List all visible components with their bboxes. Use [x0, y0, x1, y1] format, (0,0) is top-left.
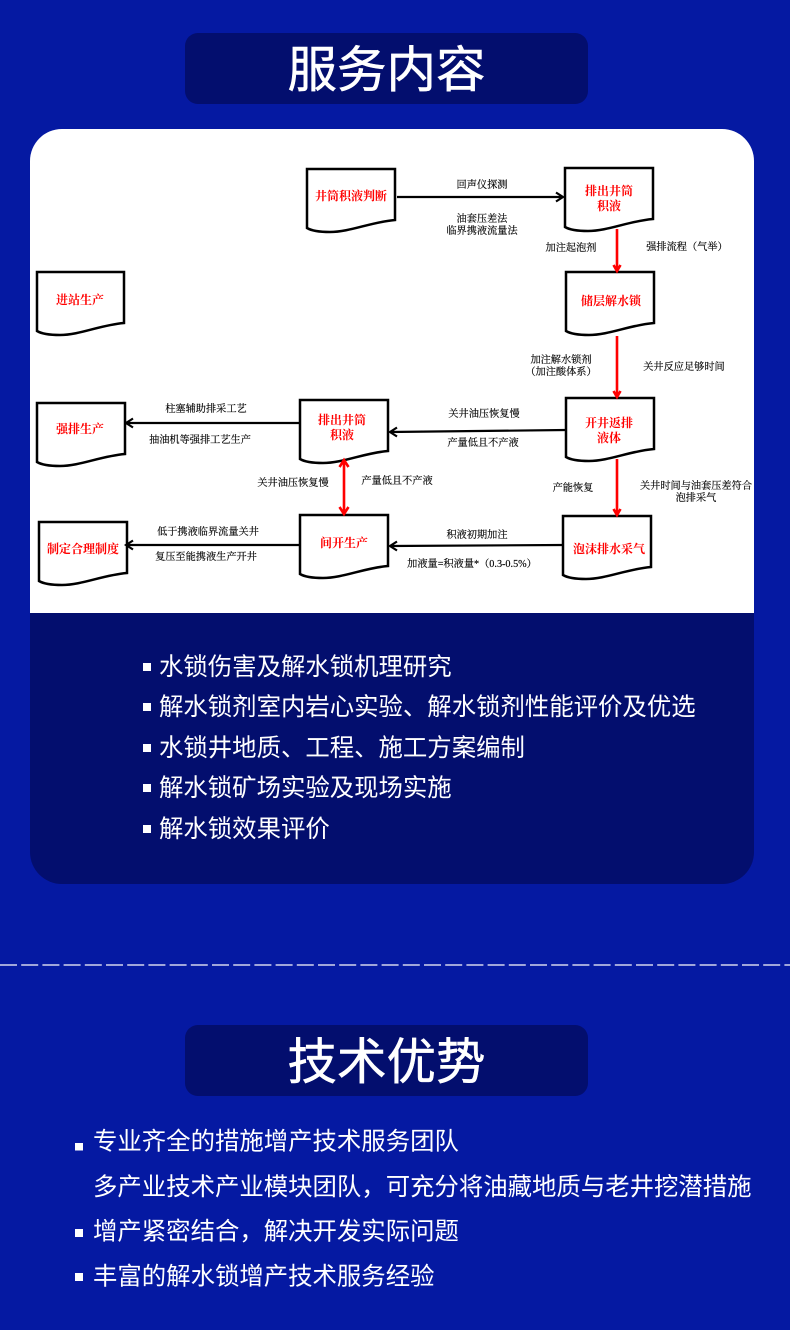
- doc: enter station production: [37, 272, 124, 335]
- doc: reasonable schedule: 制定合理制度: [47, 541, 119, 556]
- arrow: intermittent to schedule: [126, 540, 299, 550]
- doc: discharge wellbore liquid: 积液: [597, 198, 621, 213]
- labels: flow chart annotations: 关井反应足够时间: [643, 360, 725, 373]
- labels: flow chart annotations: 油套压差法: [457, 212, 508, 225]
- panel: flow chart: [30, 129, 754, 613]
- text block: advantages list: [75, 1128, 752, 1290]
- labels: flow chart annotations: 复压至能携液生产开井: [155, 550, 257, 563]
- doc: wellbore liquid judgement: 井筒积液判断: [315, 188, 387, 203]
- heading: technical advantages: [185, 1025, 588, 1096]
- list item 4: 解水锁矿场实验及现场实施: [159, 775, 452, 802]
- labels: flow chart annotations: 柱塞辅助排采工艺: [165, 402, 247, 415]
- doc: foam drainage: 泡沫排水采气: [573, 541, 645, 556]
- labels: flow chart annotations: 强排流程（气举）: [646, 240, 728, 253]
- labels: flow chart annotations: 产量低且不产液: [447, 436, 519, 449]
- arrow: double intermittent discharge: [340, 460, 348, 514]
- advantage 2: 增产紧密结合，解决开发实际问题: [93, 1218, 459, 1246]
- labels: flow chart annotations: 关井时间与油套压差符合: [640, 479, 752, 492]
- arrow: discharge to reservoir: [614, 229, 620, 271]
- labels: flow chart annotations: 加注起泡剂: [546, 241, 596, 254]
- labels: flow chart annotations: [149, 178, 752, 570]
- labels: flow chart annotations: 加注解水锁剂: [530, 353, 592, 366]
- labels: flow chart annotations: 关井油压恢复慢: [448, 407, 520, 420]
- arrow: reservoir to open well: [614, 336, 620, 397]
- doc: discharge wellbore liquid lower: 排出井筒: [318, 412, 366, 427]
- doc: forced production: 强排生产: [56, 421, 104, 436]
- labels: flow chart annotations: （加注酸体系）: [525, 365, 597, 378]
- list item 5: 解水锁效果评价: [159, 816, 330, 843]
- doc: discharge wellbore liquid: [565, 168, 653, 231]
- list item 3: 水锁井地质、工程、施工方案编制: [159, 735, 525, 762]
- doc: reservoir water unlock: [566, 272, 654, 335]
- arrow: foam to intermittent: [390, 542, 563, 550]
- advantage 3: 丰富的解水锁增产技术服务经验: [93, 1264, 434, 1290]
- doc: wellbore liquid judgement: [307, 169, 395, 232]
- labels: flow chart annotations: 关井油压恢复慢: [257, 476, 329, 489]
- arrow: judgement to discharge: [397, 192, 563, 202]
- labels: flow chart annotations: 泡排采气: [676, 491, 716, 504]
- arrow: open well to discharge: [390, 428, 566, 436]
- labels: flow chart annotations: 回声仪探测: [457, 178, 507, 191]
- heading: technical advantages: 技术优势: [288, 1035, 486, 1090]
- doc: intermittent production: 间开生产: [320, 535, 368, 550]
- labels: flow chart annotations: 低于携液临界流量关井: [157, 525, 259, 538]
- doc: enter station production: 进站生产: [56, 292, 104, 307]
- flow chart drawing: [37, 168, 752, 585]
- doc: reasonable schedule: [39, 522, 127, 585]
- doc: forced production: [37, 403, 125, 466]
- doc: open well flowback: 液体: [597, 430, 621, 445]
- labels: flow chart annotations: 产量低且不产液: [361, 474, 433, 487]
- advantage 1: 专业齐全的措施增产技术服务团队: [93, 1128, 459, 1156]
- arrow: open well to foam: [614, 459, 620, 515]
- doc: foam drainage: [563, 516, 651, 579]
- list item 2: 解水锁剂室内岩心实验、解水锁剂性能评价及优选: [159, 694, 696, 721]
- labels: flow chart annotations: 抽油机等强排工艺生产: [149, 433, 251, 446]
- advantage 1 continuation: 多产业技术产业模块团队，可充分将油藏地质与老井挖潜措施: [93, 1174, 752, 1201]
- labels: flow chart annotations: 产能恢复: [553, 481, 593, 494]
- heading: service content: 服务内容: [288, 43, 486, 98]
- doc: reservoir water unlock: 储层解水锁: [581, 293, 642, 308]
- labels: flow chart annotations: 加液量=积液量*（0.3-0.5%）: [407, 557, 537, 570]
- doc: discharge wellbore liquid: 排出井筒: [585, 183, 633, 198]
- labels: flow chart annotations: 积液初期加注: [446, 528, 508, 541]
- doc: open well flowback: 开井返排: [585, 415, 633, 430]
- arrow: discharge to forced: [126, 418, 299, 428]
- doc: discharge wellbore liquid lower: [300, 400, 388, 463]
- doc: intermittent production: [300, 515, 388, 578]
- doc: open well flowback: [566, 398, 654, 461]
- panel: service list: [30, 613, 754, 884]
- labels: flow chart annotations: 临界携液流量法: [446, 224, 518, 237]
- doc: discharge wellbore liquid lower: 积液: [330, 427, 354, 442]
- list item 1: 水锁伤害及解水锁机理研究: [159, 654, 452, 681]
- heading: service content: [185, 33, 588, 104]
